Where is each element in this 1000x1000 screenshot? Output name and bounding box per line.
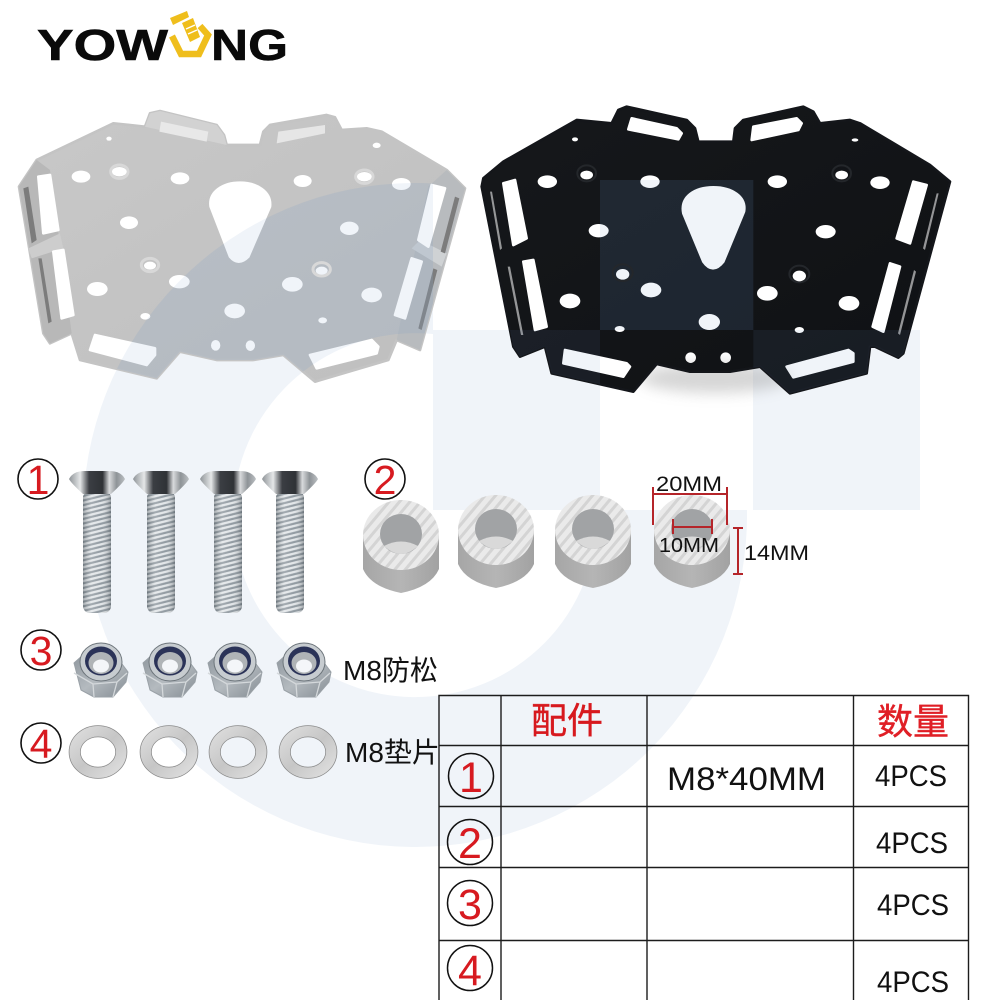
item marker 1: 1 — [27, 457, 49, 503]
black rack plate — [480, 105, 952, 395]
row 2: 4PCS — [876, 827, 948, 860]
logo icon: yellow hex nut and bolt — [170, 11, 208, 54]
row 3 — [448, 880, 949, 929]
item marker 2 — [365, 457, 405, 503]
washer label: M8垫片 — [345, 737, 440, 768]
silver rack plate — [18, 110, 466, 383]
item marker 1 — [18, 457, 58, 503]
dimension annotations: 14MM — [744, 542, 809, 565]
item marker 4 — [21, 721, 61, 767]
row 1 — [448, 754, 947, 802]
row 4: 4 — [458, 947, 482, 995]
dimension annotations — [653, 473, 809, 574]
spacers — [363, 495, 730, 593]
logo: NG — [211, 21, 288, 70]
item marker 2: 2 — [374, 457, 396, 503]
parts table — [439, 695, 968, 1000]
row 3: 4PCS — [877, 889, 949, 922]
dimension annotations: 20MM — [656, 473, 722, 496]
row 2: 2 — [458, 820, 482, 868]
row 4: 4PCS — [877, 966, 949, 999]
row 4 — [448, 946, 949, 999]
row 1: 1 — [459, 754, 483, 802]
nut label: M8防松 — [343, 655, 438, 686]
row 1: 4PCS — [875, 760, 947, 793]
table header: parts: 配件 — [531, 700, 603, 741]
washers — [75, 731, 331, 773]
logo: YOW — [37, 21, 169, 70]
black plate shadow — [640, 363, 790, 393]
table header: quantity: 数量 — [877, 701, 949, 742]
item marker 4: 4 — [30, 721, 52, 767]
background watermark — [83, 180, 920, 847]
logo — [37, 11, 288, 70]
dimension annotations: 10MM — [659, 534, 719, 557]
item marker 3: 3 — [30, 628, 52, 674]
lock nuts — [74, 643, 331, 697]
row 2 — [448, 820, 948, 868]
row 3: 3 — [458, 881, 482, 929]
bolts — [69, 471, 318, 613]
row 1: M8*40MM — [667, 761, 826, 797]
item marker 3 — [21, 628, 61, 674]
